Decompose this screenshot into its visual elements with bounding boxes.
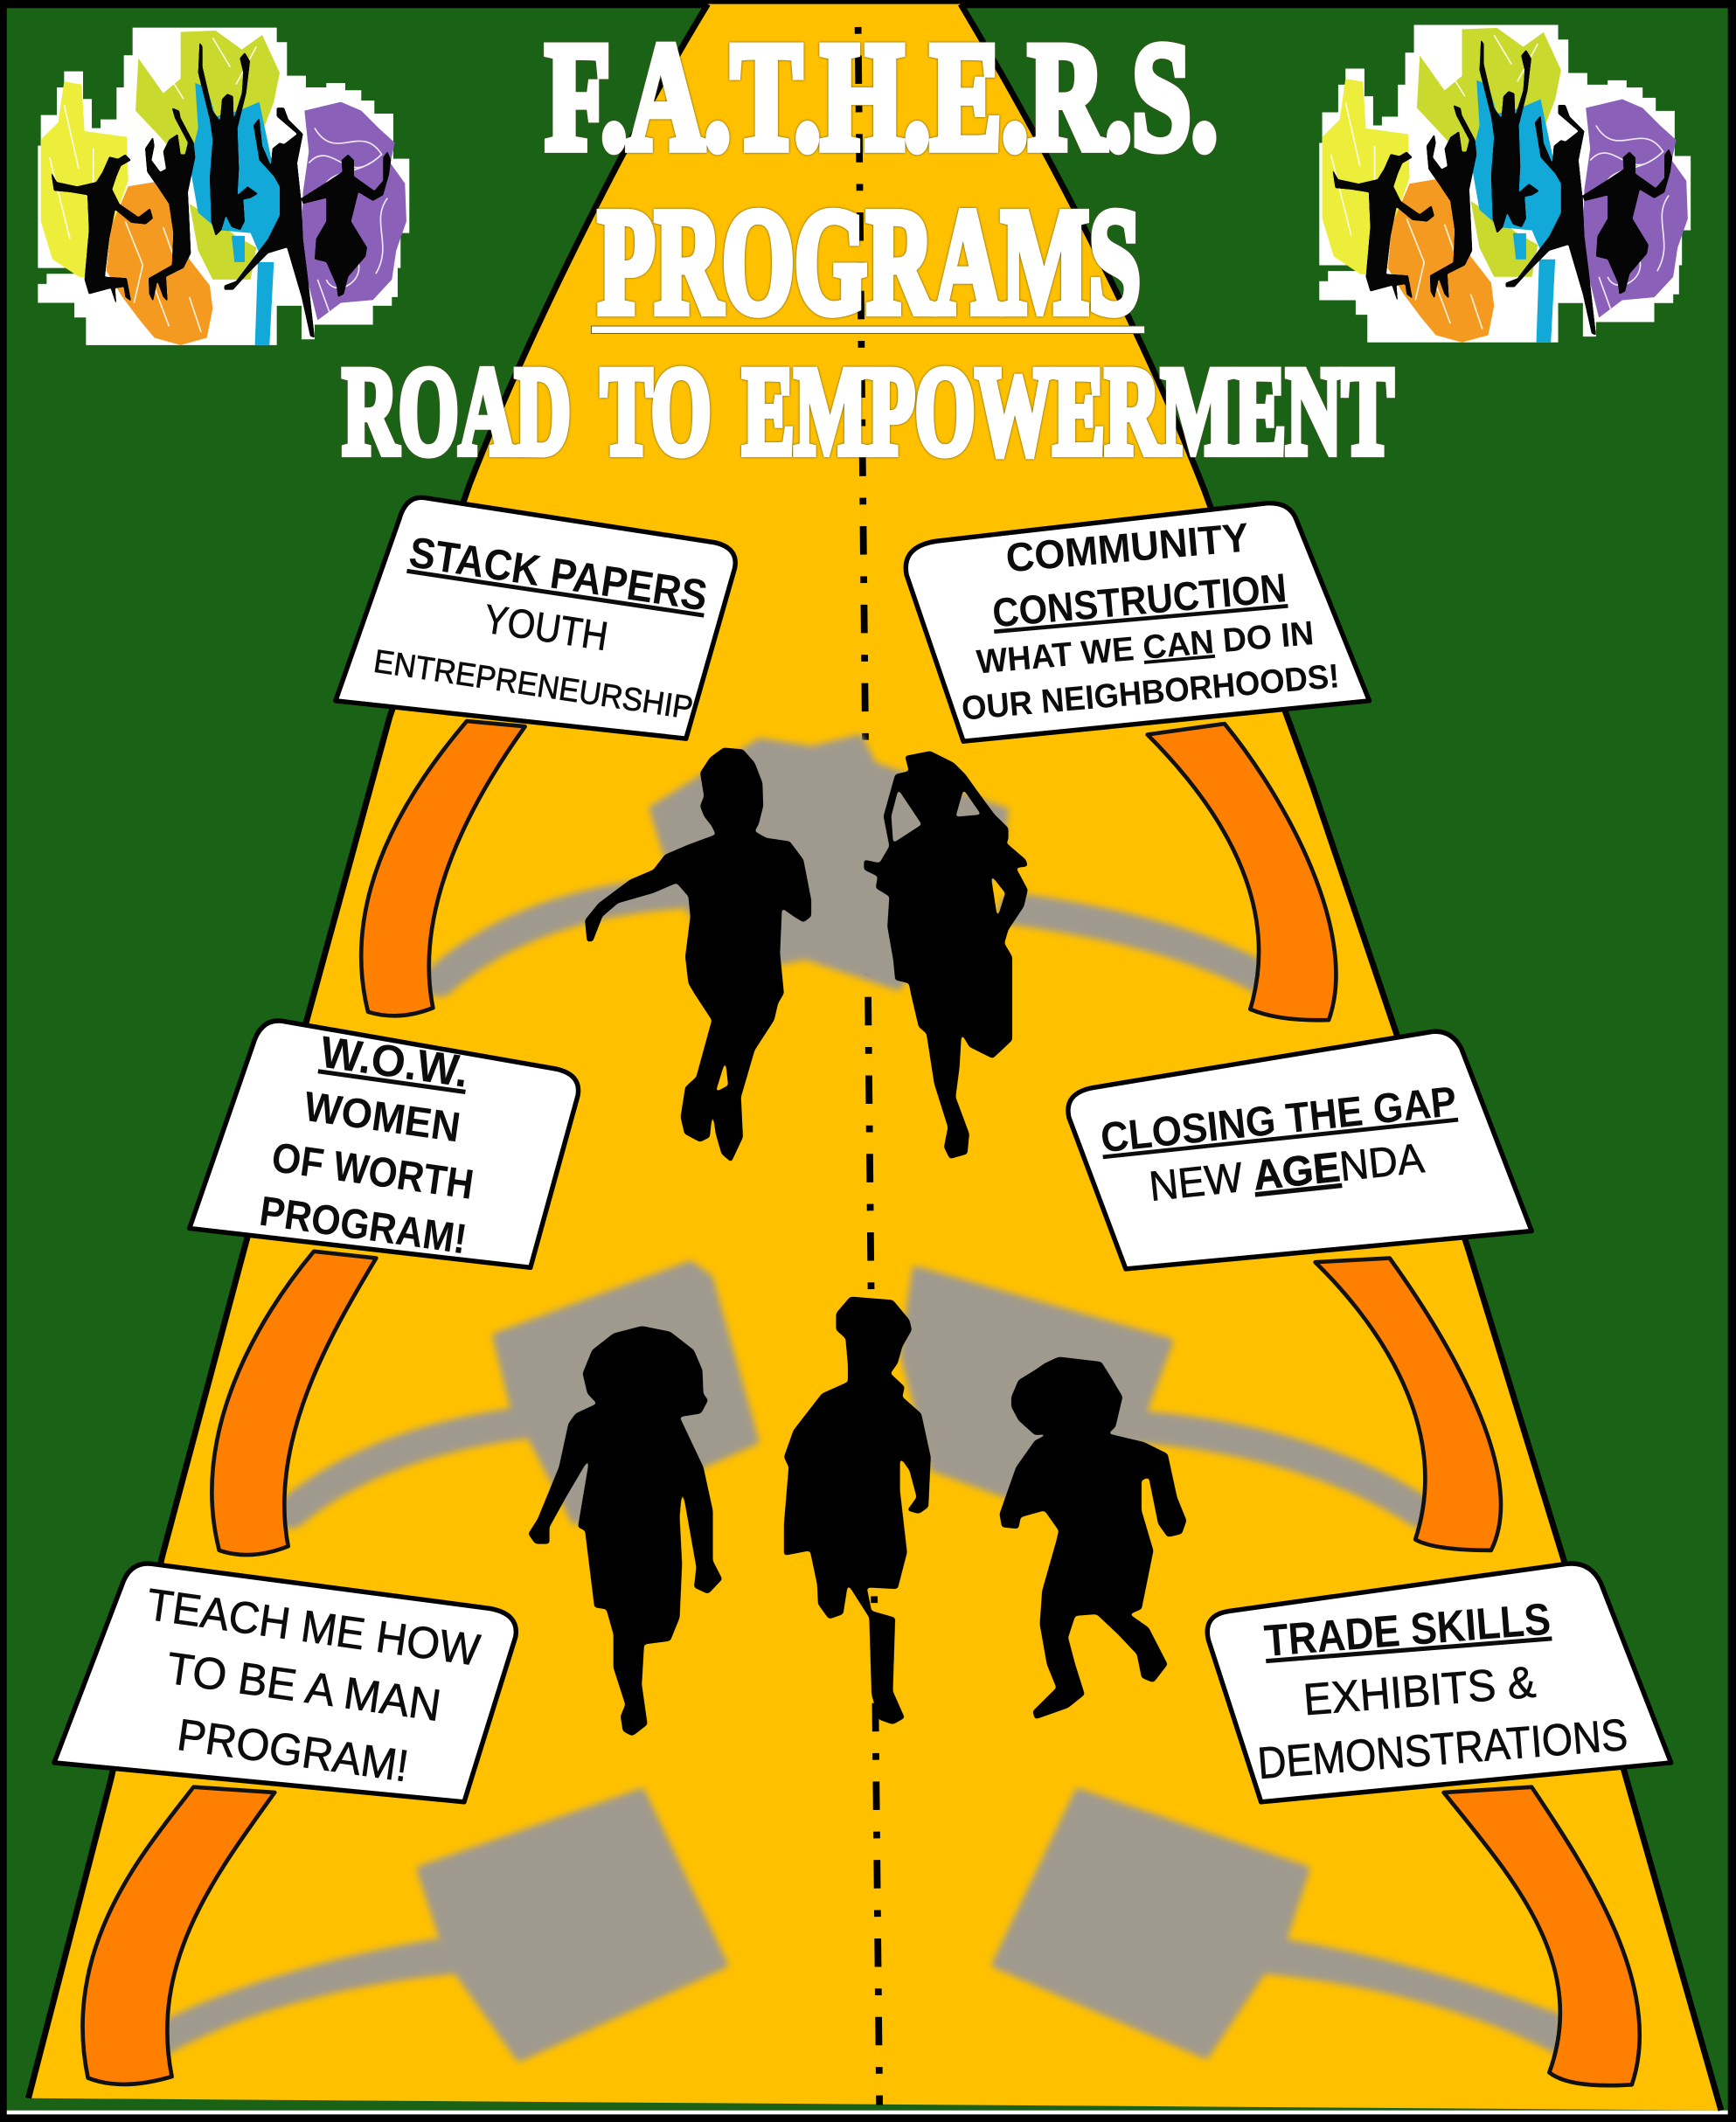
panel: teach me how to be a man sign bbox=[54, 1564, 516, 1802]
sign line: TO BE A MAN bbox=[163, 1643, 444, 1730]
runner: boy, top left bbox=[585, 747, 811, 1162]
runner: boy, bottom centre bbox=[784, 1296, 931, 1724]
panel: stack papers sign bbox=[336, 497, 735, 739]
panel: community construction sign bbox=[906, 503, 1370, 741]
sign line: PROGRAM! bbox=[257, 1189, 469, 1263]
sign heading: CONSTRUCTION bbox=[990, 565, 1288, 635]
sign heading: TRADE SKILLS bbox=[1262, 1593, 1552, 1666]
panel: women of worth sign bbox=[190, 1021, 579, 1267]
sign line: COMMUNITY bbox=[1004, 514, 1251, 580]
sign line: DEMONSTRATIONS bbox=[1256, 1709, 1629, 1788]
blurred sign shadows on the road bbox=[163, 734, 1560, 2057]
title line 2: PROGRAMS bbox=[598, 179, 1141, 345]
title line 1: F.A.T.H.E.R.S. bbox=[545, 11, 1218, 182]
sign line: WHAT WE CAN DO IN bbox=[975, 614, 1316, 682]
sign line: TEACH ME HOW bbox=[143, 1579, 483, 1675]
sign heading: STACK PAPERS bbox=[406, 528, 711, 621]
runner: girl, top right bbox=[864, 751, 1028, 1159]
sign line: EXHIBITS & bbox=[1302, 1657, 1538, 1724]
title underline bbox=[591, 326, 1145, 334]
frame bottom strip bbox=[7, 2111, 1728, 2114]
sign post: stack papers bbox=[361, 721, 525, 1016]
sign post: community construction bbox=[1148, 724, 1336, 1020]
sign line: WOMEN bbox=[302, 1084, 463, 1151]
icon: dancers splash, right bbox=[1319, 25, 1691, 343]
shadow: bottom left bbox=[420, 1793, 724, 2057]
title bbox=[343, 11, 1393, 482]
shadow: middle right bbox=[904, 1270, 1169, 1494]
sign heading: CLOSING THE GAP bbox=[1099, 1078, 1459, 1162]
sign post: closing the gap bbox=[1316, 1259, 1501, 1550]
runner: girl, bottom left bbox=[528, 1326, 722, 1737]
sign line: OF WORTH bbox=[269, 1134, 476, 1209]
shadow: top pair bbox=[649, 734, 1008, 990]
sign line: OUR NEIGHBORHOODS! bbox=[960, 657, 1341, 728]
sign post: women of worth bbox=[212, 1252, 376, 1555]
sign line: YOUTH bbox=[481, 596, 611, 659]
sign line: NEW AGENDA bbox=[1147, 1135, 1427, 1210]
sign line: PROGRAM! bbox=[174, 1709, 412, 1791]
shadow: middle left bbox=[496, 1265, 755, 1521]
sign post: teach me bbox=[82, 1787, 274, 2084]
sign line: ENTREPRENEURSHIP bbox=[372, 642, 696, 726]
road centre line bbox=[858, 7, 879, 2105]
sign heading: W.O.W. bbox=[317, 1027, 472, 1097]
sign post: trade skills bbox=[1444, 1787, 1640, 2085]
icon: dancers splash, left bbox=[38, 28, 409, 345]
shadow: bottom right bbox=[996, 1793, 1306, 2055]
panel: closing the gap sign bbox=[1068, 1031, 1531, 1269]
runner: girl, bottom right bbox=[999, 1356, 1186, 1720]
panel: trade skills sign bbox=[1207, 1564, 1671, 1802]
